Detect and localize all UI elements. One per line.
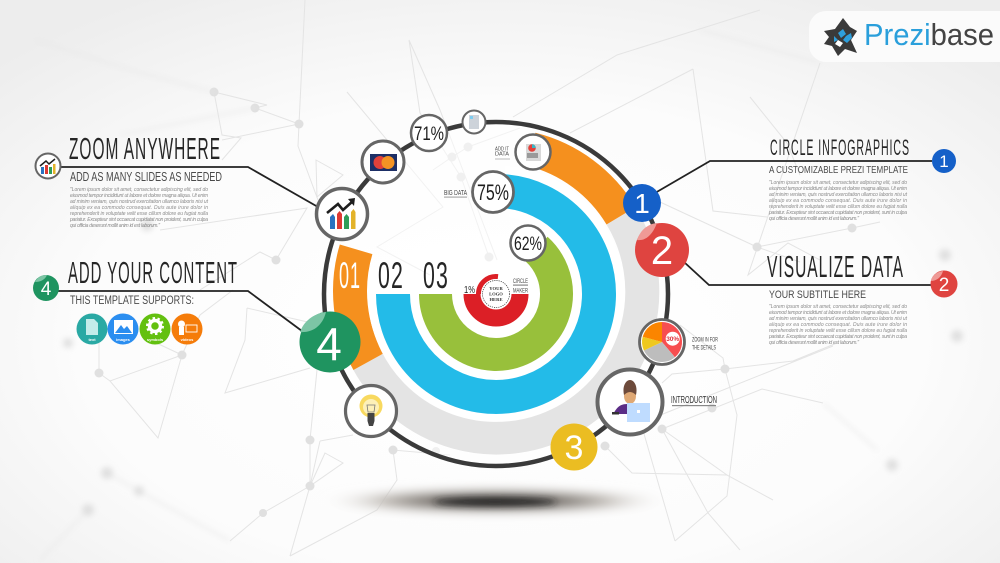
label: report: DATA: [495, 152, 510, 158]
body text: eiusmod tempor incididunt ut labore et dolore magna aliqua. Ut enim: [70, 193, 208, 199]
label: big data: BIG DATA: [444, 188, 467, 197]
label: report: [495, 146, 510, 160]
label: zoom in for the details: ZOOM IN FOR: [692, 336, 718, 344]
label: circle maker: CIRCLE: [513, 278, 528, 285]
node: 71%: [411, 115, 447, 151]
node: pie chart: [640, 320, 684, 364]
icon: images: [108, 314, 138, 344]
label: introduction: INTRODUCTION: [671, 395, 717, 406]
node: 62%: [510, 226, 546, 260]
label: big data: [444, 188, 467, 198]
orange ring segment top: [531, 149, 621, 216]
body text: ad minim veniam, quis nostrud exercitation ullamco laboris nisi ut: [769, 192, 908, 198]
icon: videos: videos: [181, 337, 194, 342]
icon: symbols: symbols: [147, 337, 164, 342]
badge: 2: 2: [651, 229, 673, 273]
badge: small 1: 1: [939, 152, 949, 171]
body text: reprehenderit in voluptate velit esse cillum dolore eu fugiat nulla: [769, 328, 907, 334]
badge: small 2: [930, 270, 958, 298]
body text: reprehenderit in voluptate velit esse cillum dolore eu fugiat nulla: [70, 211, 208, 217]
node: light bulb: [346, 386, 396, 436]
node: credit card: [362, 141, 404, 183]
body text: "Lorem ipsum dolor sit amet, consectetur adipiscing elit, sed do: [769, 304, 907, 310]
subtitle: YOUR SUBTITLE HERE: [769, 289, 866, 301]
icon: text: [76, 314, 108, 344]
body text: ad minim veniam, quis nostrud exercitation ullamco laboris nisi ut: [70, 199, 209, 205]
center logo badge: LOGO: [489, 292, 503, 296]
column labels 01 02 03: [339, 255, 449, 296]
body text: "Lorem ipsum dolor sit amet, consectetur adipiscing elit, sed do: [70, 187, 208, 193]
panel: zoom anywhere: [36, 131, 222, 229]
body text: pariatur. Excepteur sint occaecat cupidatat non proident, sunt in culpa: [768, 334, 907, 340]
icon: text: text: [88, 337, 96, 342]
body text: eiusmod tempor incididunt ut labore et dolore magna aliqua. Ut enim: [769, 310, 907, 316]
badge: 1: 1: [634, 188, 650, 219]
column labels 01 02 03: 01: [339, 255, 361, 296]
icon: images: images: [116, 337, 131, 342]
body text: pariatur. Excepteur sint occaecat cupidatat non proident, sunt in culpa: [69, 217, 208, 223]
subtitle: THIS TEMPLATE SUPPORTS:: [70, 295, 194, 307]
main circle disc: [325, 123, 667, 465]
badge: 4: [300, 312, 360, 372]
text: ADD YOUR CONTENT: [68, 255, 238, 290]
badge: 3: [550, 424, 598, 470]
center logo badge: [481, 279, 511, 309]
orange ring segment left: [350, 249, 368, 362]
small chart icon: [36, 154, 60, 178]
node: 71%: 71%: [414, 124, 444, 145]
subtitle: A CUSTOMIZABLE PREZI TEMPLATE: [769, 164, 908, 176]
gray ring segment: [368, 216, 642, 438]
center logo badge: YOUR: [489, 286, 503, 291]
badge: small 4: 4: [41, 279, 52, 300]
label: circle maker: MAKER: [513, 288, 528, 294]
label: zoom in for the details: [692, 336, 718, 352]
column labels 01 02 03: 03: [423, 255, 449, 296]
label: zoom in for the details: THE DETAILS: [692, 344, 716, 352]
background network: sharp nodes: [94, 88, 856, 517]
body text: qui officia deserunt mollit anim id est laborum.": [769, 216, 859, 222]
outer ring: [324, 122, 668, 466]
icon: videos: [172, 314, 202, 344]
body text: [768, 304, 908, 346]
label: 1%: 1%: [464, 285, 475, 296]
panel: add your content: [33, 255, 238, 344]
badge: 1: [623, 184, 661, 222]
green ring 62%: [436, 249, 556, 354]
node: document: [462, 110, 486, 134]
red ring 1%: [472, 276, 520, 318]
node: 75%: 75%: [477, 180, 509, 205]
body text: [69, 187, 209, 229]
label: report: ADD IT: [495, 146, 509, 152]
label: circle maker: [513, 278, 528, 294]
node: 75%: [472, 172, 514, 212]
white separator bands: [372, 170, 620, 418]
body text: eiusmod tempor incididunt ut labore et dolore magna aliqua. Ut enim: [769, 186, 907, 192]
body text: qui officia deserunt mollit anim id est laborum.": [70, 223, 160, 229]
panel: visualize data: [767, 249, 958, 346]
badge: small 2: 2: [939, 275, 949, 296]
node: report: [516, 134, 550, 170]
body text: [768, 180, 908, 222]
blue ring 75%: [393, 191, 599, 397]
body text: aliquip ex ea commodo consequat. Duis aute irure dolor in: [769, 322, 907, 328]
node: pie chart: 30%: [666, 336, 679, 343]
badge: small 1: [932, 149, 956, 173]
background network: sharp lines: [99, 0, 880, 556]
badge: 2: [635, 223, 689, 277]
callout line: visualize data: [684, 262, 931, 285]
center logo badge: HERE: [489, 297, 503, 302]
body text: "Lorem ipsum dolor sit amet, consectetur adipiscing elit, sed do: [769, 180, 907, 186]
node: growth chart: [316, 188, 368, 240]
node: introduction person: [598, 370, 662, 434]
node: 62%: 62%: [514, 234, 542, 255]
icon: symbols: [140, 314, 170, 344]
body text: aliquip ex ea commodo consequat. Duis aute irure dolor in: [70, 205, 208, 211]
logo mark: [824, 18, 857, 56]
label: introduction: [671, 395, 717, 406]
body text: qui officia deserunt mollit anim id est laborum.": [769, 340, 859, 346]
body text: aliquip ex ea commodo consequat. Duis aute irure dolor in: [769, 198, 907, 204]
subtitle: ADD AS MANY SLIDES AS NEEDED: [70, 170, 222, 184]
panel: circle infographics: [768, 135, 956, 222]
callout line: zoom anywhere: [60, 167, 318, 207]
badge: 3: 3: [565, 429, 583, 467]
body text: pariatur. Excepteur sint occaecat cupidatat non proident, sunt in culpa: [768, 210, 907, 216]
body text: ad minim veniam, quis nostrud exercitation ullamco laboris nisi ut: [769, 316, 908, 322]
badge: small 4: [33, 275, 59, 301]
floor shadow: [320, 487, 670, 515]
callout line: circle infographics: [655, 161, 932, 193]
column labels 01 02 03: 02: [378, 255, 404, 296]
callout line: add your content: [58, 291, 306, 334]
badge: 4: 4: [316, 318, 342, 370]
body text: reprehenderit in voluptate velit esse cillum dolore eu fugiat nulla: [769, 204, 907, 210]
panel: zoom anywhere: ZOOM ANYWHERE: [69, 131, 221, 166]
logo panel: [809, 11, 1000, 62]
logo wordmark: Prezibase: [864, 17, 994, 52]
